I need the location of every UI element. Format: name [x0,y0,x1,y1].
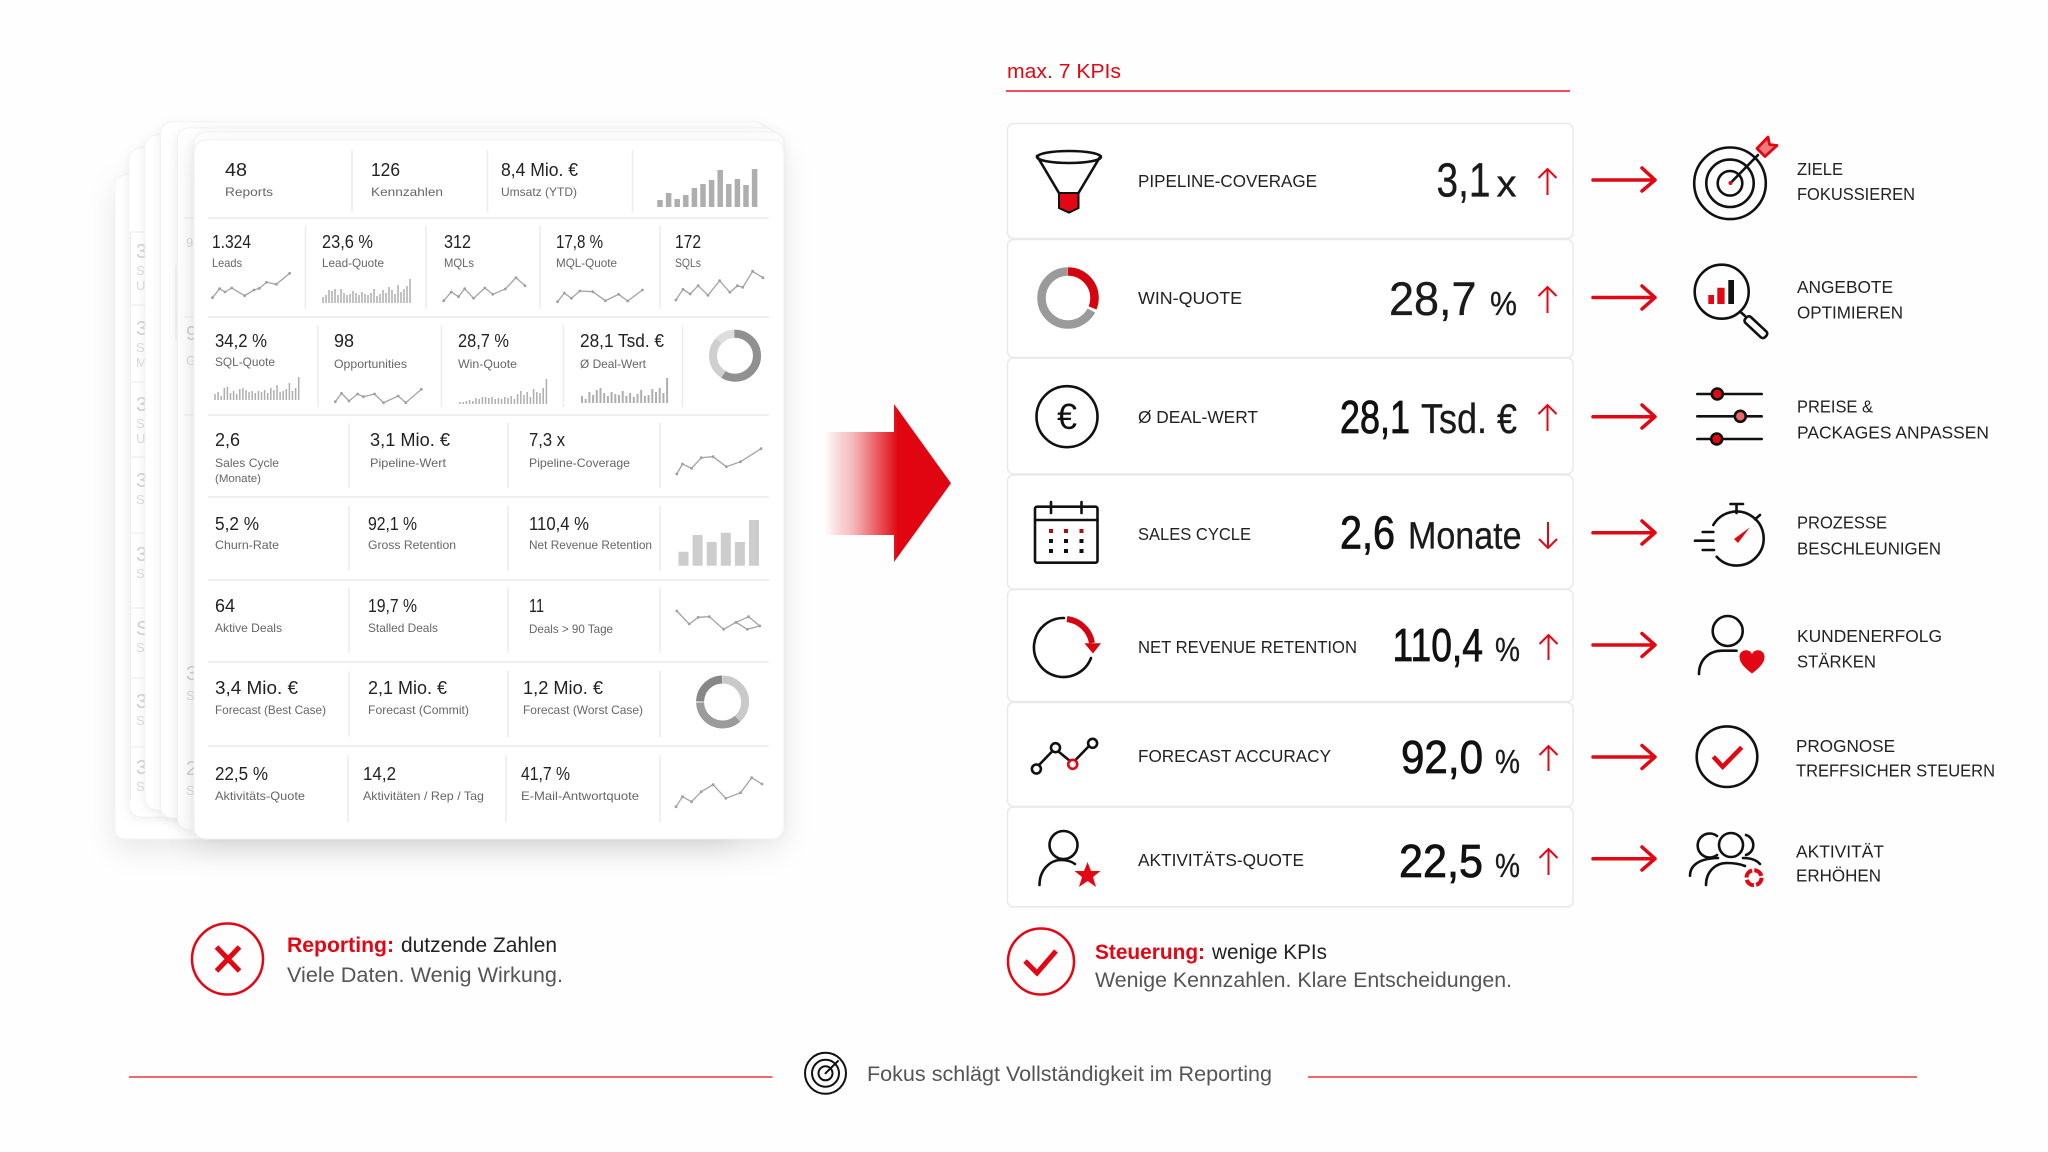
row 2: funnel metrics [212,226,763,309]
row 2: funnel metrics: Leads [212,256,242,270]
text: Prozesse beschleunigen [1797,512,1941,558]
panel: stacked report pages behind: S [136,640,145,655]
text: Aktivität erhöhen: AKTIVITÄT [1796,842,1884,862]
row 7: forecast metrics: Forecast (Best Case) [215,703,326,717]
row 2: funnel metrics: Lead-Quote [322,256,384,270]
icon: sliders [1697,388,1762,444]
arrow: trend up [1538,169,1556,195]
panel: stacked report pages behind: S [136,263,145,278]
text: Preise und Packages anpassen: PACKAGES ANPASSEN [1797,422,1989,442]
row 2: funnel metrics: SQLs [675,256,701,270]
panel: stacked report pages behind: S [136,779,145,794]
row 2: funnel metrics: 312 [444,231,471,252]
panel: KPI row Win-Quote: 28,7 [1389,272,1476,325]
icon: euro coin [1036,386,1098,447]
row 6: deal metrics: 11 [529,595,544,616]
panel: stacked report pages behind: M [136,355,147,370]
panel: stacked report pages behind: S [136,713,145,728]
text: Prozesse beschleunigen: PROZESSE [1797,512,1887,532]
row 5: retention metrics: Churn-Rate [215,538,279,552]
panel: stacked report pages behind: 3 [186,663,197,685]
row 1: overview numbers: Umsatz (YTD) [501,185,577,199]
row 1: overview numbers: Reports [225,185,273,199]
panel: KPI row Forecast Accuracy: % [1495,743,1520,780]
row 5: retention metrics: Gross Retention [368,538,456,552]
callout: Steuerung: Wenige Kennzahlen. Klare Entscheidungen. [1095,969,1512,992]
row 3: conversion metrics: 98 [334,330,354,351]
arrow: trend up [1540,849,1558,875]
row 4: sales cycle and pipeline: Sales Cycle [215,456,279,470]
arrow: to Angebote optimieren [1593,286,1655,309]
row 2: funnel metrics: 172 [675,231,701,252]
panel: stacked report pages behind: 9 [186,323,197,345]
row 5: retention metrics: Net Revenue Retention [529,538,652,552]
row 8: activity metrics: Aktivitäts-Quote [215,789,305,803]
row 2: funnel metrics: 1.324 [212,231,251,252]
footer: key message [129,1053,1917,1094]
row 7: forecast metrics: Forecast (Worst Case) [523,703,643,717]
panel: stacked report pages behind: 3 [136,241,147,263]
text: Ziele fokussieren [1797,159,1915,204]
panel: stacked report pages behind: 3 [136,470,147,492]
icon: calendar [1035,502,1098,563]
row 1: overview numbers: Kennzahlen [371,185,443,199]
row 4: sales cycle and pipeline: (Monate) [215,473,261,485]
callout: Reporting [192,924,563,994]
panel: stacked report pages behind: U [136,278,145,293]
icon: magnifier with bars [1695,265,1768,339]
row 5: retention metrics: 110,4 % [529,513,589,534]
row 8: activity metrics: 22,5 % [215,763,268,784]
arrow: to Prozesse beschleunigen [1593,521,1655,544]
row 3: conversion metrics [215,325,757,407]
panel: KPI row Win-Quote: % [1490,285,1517,322]
text: Aktivität erhöhen: ERHÖHEN [1796,866,1881,886]
row 4: sales cycle and pipeline: 2,6 [215,429,240,450]
panel: main reporting dashboard card [194,140,784,839]
row 6: deal metrics: Stalled Deals [368,621,438,635]
panel: KPI row Pipeline-Coverage: PIPELINE-COVERAGE [1138,171,1317,191]
text: Angebote optimieren: OPTIMIEREN [1797,302,1903,322]
panel: stacked report pages behind: S [136,618,149,640]
row 6: deal metrics: 64 [215,595,235,616]
panel: stacked report pages behind: S [136,492,145,507]
row 3: conversion metrics: 28,1 Tsd. € [580,330,665,351]
text: Preise und Packages anpassen: PREISE & [1797,396,1873,416]
icon: red check [1008,928,1074,994]
arrow: to Preise und Packages anpassen [1593,405,1655,428]
text: Prozesse beschleunigen: BESCHLEUNIGEN [1797,538,1941,558]
panel: KPI row Aktivitäts-Quote [1008,807,1573,907]
callout: Steuerung: wenige KPIs [1211,941,1327,964]
panel: stacked report pages behind: 3 [136,691,147,713]
panel: KPI row Deal-Wert: Tsd. € [1421,395,1517,442]
icon: team with activity ring [1690,833,1762,885]
icon: euro coin: € [1057,396,1077,437]
text: Prognose treffsicher steuern: PROGNOSE [1796,736,1895,756]
row 1: overview numbers: 8,4 Mio. € [501,159,579,180]
text: Prognose treffsicher steuern [1796,736,1995,781]
panel: stacked report pages behind: S [136,340,145,355]
panel: KPI row Win-Quote: WIN-QUOTE [1138,288,1242,308]
panel: stacked report pages behind: 2 [186,758,197,780]
callout: Steuerung: Steuerung: [1095,941,1205,964]
arrow: to Kundenerfolg stärken [1593,634,1655,656]
text: Preise und Packages anpassen [1797,396,1989,442]
panel: KPI row Deal-Wert: 28,1 [1340,391,1410,443]
icon: person with heart [1699,616,1764,674]
icon: check circle [1697,726,1757,787]
row 3: conversion metrics: 28,7 % [458,330,509,351]
callout: Reporting: Reporting: [287,934,394,957]
callout: Reporting: Viele Daten. Wenig Wirkung. [287,964,563,987]
row 7: forecast metrics: 3,4 Mio. € [215,677,299,698]
panel: stacked report pages behind: S [136,416,145,431]
row 4: sales cycle and pipeline: Pipeline-Coverage [529,456,630,470]
panel: stacked report pages behind: S [186,783,195,798]
row 3: conversion metrics: SQL-Quote [215,355,275,369]
panel: stacked report pages behind: 3 [136,757,147,779]
row 5: retention metrics: 92,1 % [368,513,417,534]
panel: KPI row Forecast Accuracy: FORECAST ACCURACY [1138,746,1331,766]
panel: stacked report pages behind: 9 [186,235,193,250]
row 4: sales cycle and pipeline: 7,3 x [529,429,566,450]
panel: stacked report pages behind: S [136,566,145,581]
row 3: conversion metrics: Win-Quote [458,357,517,371]
panel: KPI row Deal-Wert: Ø DEAL-WERT [1138,407,1258,427]
row 7: forecast metrics: 2,1 Mio. € [368,677,448,698]
panel: KPI row Sales Cycle [1008,475,1573,589]
row 2: funnel metrics: MQL-Quote [556,256,617,270]
panel: KPI row Net Revenue Retention: NET REVENUE RETENTION [1138,637,1357,657]
row 5: retention metrics [215,506,754,571]
arrow: trend down [1539,522,1557,548]
panel: KPI row Sales Cycle: Monate [1408,516,1522,558]
row 3: conversion metrics: Ø Deal-Wert [580,357,647,371]
panel: KPI row Net Revenue Retention: 110,4 [1392,619,1483,671]
row 1: overview numbers: 126 [371,159,400,180]
text: Ziele fokussieren: FOKUSSIEREN [1797,184,1915,204]
icon: person with star [1040,831,1100,887]
row 1: overview numbers: 48 [225,159,247,180]
footer: key message: Fokus schlägt Vollständigkeit im Reporting [867,1063,1272,1086]
arrow: trend up [1538,405,1556,431]
icon: target [1694,137,1777,219]
panel: KPI row Forecast Accuracy: 92,0 [1401,731,1483,783]
text: Angebote optimieren: ANGEBOTE [1797,277,1893,297]
row 8: activity metrics: 14,2 [363,763,396,784]
row 6: deal metrics: Aktive Deals [215,621,282,635]
text: Kundenerfolg stärken: KUNDENERFOLG [1797,626,1942,646]
row 7: forecast metrics [215,670,754,737]
text: Kundenerfolg stärken: STÄRKEN [1797,652,1876,672]
row 2: funnel metrics: 17,8 % [556,231,603,252]
row 8: activity metrics: Aktivitäten / Rep / Tag [363,789,484,803]
callout: Steuerung [1008,928,1512,994]
row 8: activity metrics [215,755,762,822]
panel: KPI row Pipeline-Coverage: 3,1 [1436,154,1490,208]
panel: KPI row Forecast Accuracy [1008,702,1573,806]
panel: stacked report pages behind: S [186,688,195,703]
row 6: deal metrics: Deals > 90 Tage [529,622,613,636]
arrow: trend up [1538,287,1556,313]
icon: forecast line [1032,739,1097,774]
panel: KPI row Deal-Wert [1008,358,1573,474]
arrow: big red transition arrow [825,404,951,562]
panel: stacked report pages behind: G [186,353,196,368]
icon: funnel [1037,151,1101,213]
panel: KPI row Net Revenue Retention: % [1495,631,1520,668]
panel: KPI row Sales Cycle: SALES CYCLE [1138,524,1251,544]
panel: stacked report pages behind [115,122,784,839]
text: Aktivität erhöhen [1796,842,1884,886]
icon: red cross [192,924,263,994]
panel: KPI row Aktivitäts-Quote: % [1495,847,1520,884]
arrow: to Aktivität erhöhen [1593,847,1655,870]
icon: retention circle [1034,618,1101,677]
panel: stacked report pages behind: 3 [136,318,147,340]
heading: max. 7 KPIs: max. 7 KPIs [1007,61,1121,83]
row 6: deal metrics [215,588,760,653]
row 3: conversion metrics: Opportunities [334,357,407,371]
panel: stacked report pages behind: 3 [136,544,147,566]
row 4: sales cycle and pipeline [215,423,761,488]
text: Kundenerfolg stärken [1797,626,1942,672]
row 3: conversion metrics: 34,2 % [215,330,267,351]
row 7: forecast metrics: 1,2 Mio. € [523,677,604,698]
row 8: activity metrics: 41,7 % [521,763,570,784]
row 4: sales cycle and pipeline: Pipeline-Wert [370,456,447,470]
row 2: funnel metrics: MQLs [444,256,474,270]
icon: win-quote donut [1041,271,1095,325]
panel: KPI row Pipeline-Coverage [1008,124,1573,238]
icon: footer target [805,1053,846,1094]
row 6: deal metrics: 19,7 % [368,595,417,616]
panel: KPI row Sales Cycle: 2,6 [1340,506,1395,558]
arrow: to Prognose steuern [1593,746,1655,768]
arrow: trend up [1540,746,1558,771]
text: Ziele fokussieren: ZIELE [1797,159,1843,179]
arrow: to Ziele fokussieren [1593,168,1655,191]
panel: stacked report pages behind: 3 [136,394,147,416]
row 7: forecast metrics: Forecast (Commit) [368,703,469,717]
row 4: sales cycle and pipeline: 3,1 Mio. € [370,429,451,450]
row 8: activity metrics: E-Mail-Antwortquote [521,789,639,803]
arrow: trend up [1540,635,1558,660]
row 5: retention metrics: 5,2 % [215,513,259,534]
panel: KPI row Aktivitäts-Quote: AKTIVITÄTS-QUOTE [1138,850,1304,870]
panel: KPI row Pipeline-Coverage: x [1496,164,1516,206]
icon: stopwatch [1695,504,1764,566]
callout: Reporting: dutzende Zahlen [401,934,557,957]
text: Prognose treffsicher steuern: TREFFSICHER STEUERN [1796,761,1995,781]
panel: KPI row Net Revenue Retention [1008,590,1573,702]
text: Angebote optimieren [1797,277,1903,322]
row 2: funnel metrics: 23,6 % [322,231,373,252]
panel: stacked report pages behind: U [136,431,145,446]
row dividers [208,218,769,746]
panel: KPI row Aktivitäts-Quote: 22,5 [1399,835,1483,887]
panel: KPI row Win-Quote [1008,240,1573,358]
row 1: overview numbers [225,150,755,212]
